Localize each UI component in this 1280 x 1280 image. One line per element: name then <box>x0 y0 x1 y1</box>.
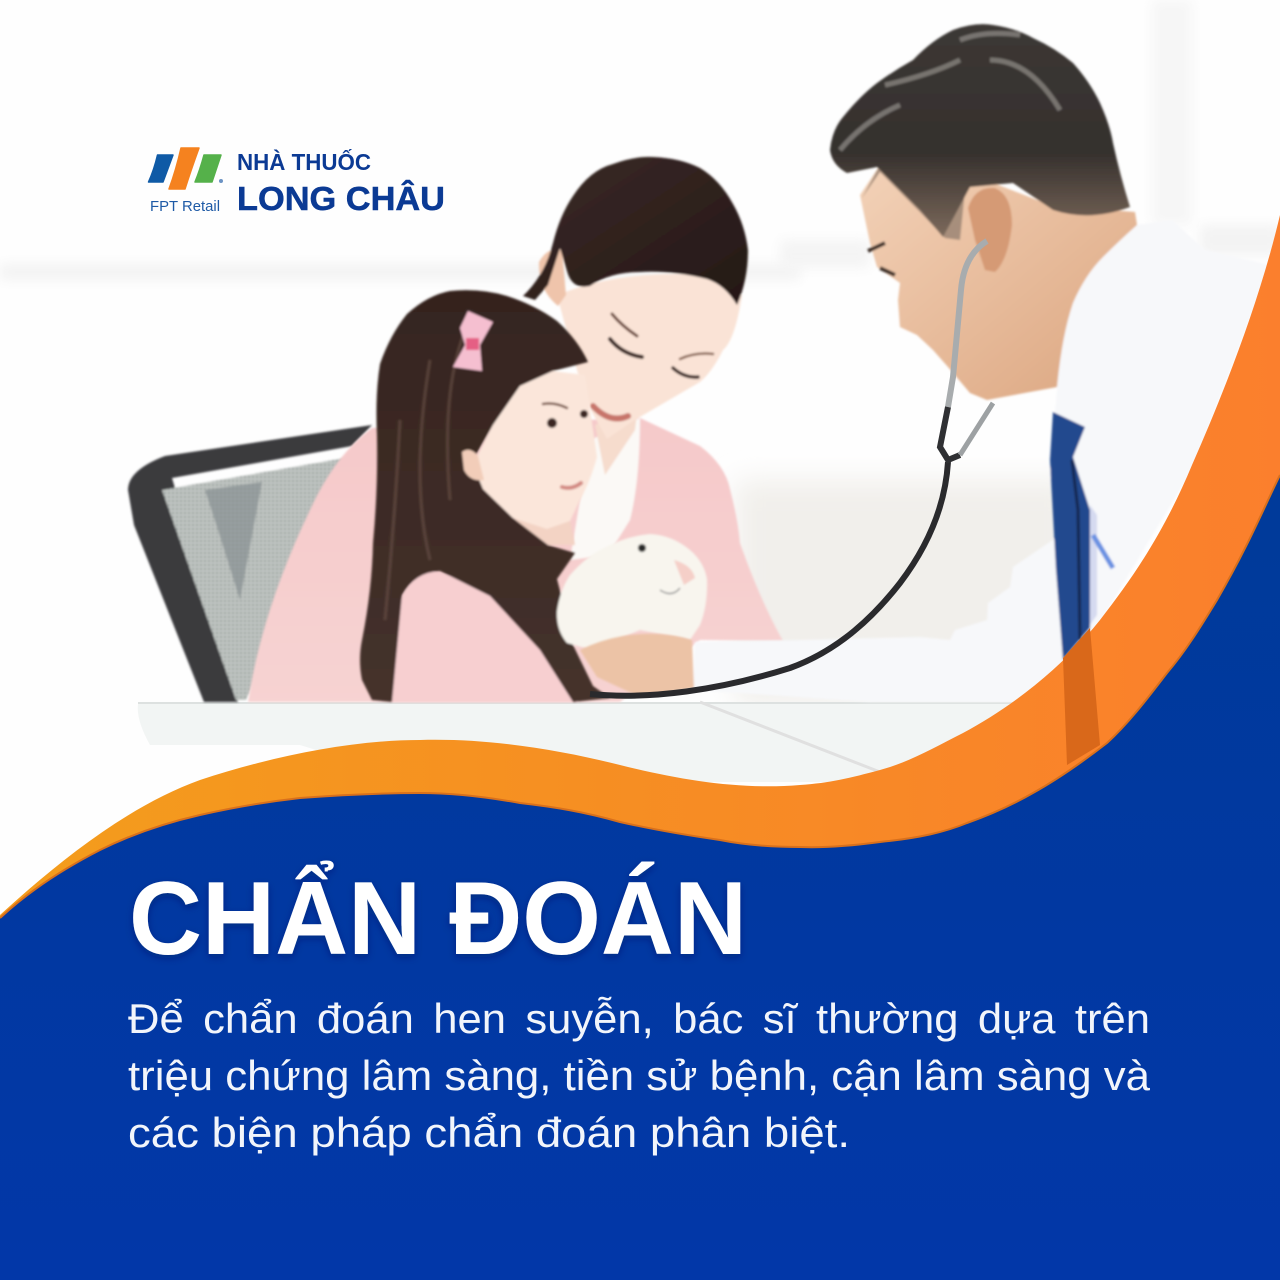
logo: Nhà thuốc: NHÀ THUỐC <box>237 148 371 175</box>
title: CHẨN ĐOÁN <box>129 861 747 977</box>
doctor's shirt shadow <box>1090 505 1097 625</box>
doctor's eyebrow and eye <box>868 243 895 275</box>
girl's hair highlights <box>385 320 470 620</box>
body text <box>128 995 1151 1156</box>
girl's hair <box>360 290 610 702</box>
doctor's hand <box>580 634 694 697</box>
girl's bow <box>453 311 493 371</box>
photo: mother <box>248 157 783 702</box>
mother's eyes and lips <box>593 314 713 418</box>
orange swoosh <box>0 215 1280 1000</box>
girl's face <box>473 371 597 529</box>
mother's neck <box>595 405 638 475</box>
photo background <box>0 0 1280 900</box>
mother's hair <box>523 157 748 305</box>
photo: girl <box>360 290 707 702</box>
mother's face <box>557 274 742 439</box>
mother's ear <box>539 249 566 306</box>
blue wave background <box>0 475 1280 1280</box>
toy rabbit <box>557 534 707 650</box>
mother's cardigan <box>248 418 783 702</box>
photo: doctor <box>580 24 1270 702</box>
mother's shirt <box>570 418 640 560</box>
line 3: các biện pháp chẩn đoán phân biệt. <box>128 1109 850 1156</box>
photo: desk <box>138 702 1020 782</box>
girl's ear <box>462 450 484 480</box>
logo: Long Châu: LONG CHÂU <box>237 180 445 217</box>
swoosh lower edge <box>0 475 1280 918</box>
line 2: triệu chứng lâm sàng, tiền sử bệnh, cận lâm sàng và <box>128 1052 1151 1099</box>
doctor's face and neck <box>860 165 1137 400</box>
line 1: Để chẩn đoán hen suyễn, bác sĩ thường dựa trên <box>128 995 1150 1042</box>
logo mark <box>148 148 223 189</box>
tie showing through orange swoosh <box>1063 628 1100 765</box>
doctor's ear <box>968 188 1012 272</box>
doctor's pen <box>1093 535 1113 568</box>
girl's eyes and mouth <box>543 404 588 488</box>
doctor's tie <box>1050 412 1090 660</box>
photo: chair <box>128 425 372 702</box>
logo <box>148 148 445 217</box>
doctor's grey hair highlights <box>840 33 1060 150</box>
doctor's coat <box>693 220 1270 702</box>
girl's dress <box>390 571 578 702</box>
photo: stethoscope <box>590 241 993 696</box>
logo: FPT Retail: FPT Retail <box>150 198 220 215</box>
girl's neck <box>510 515 575 545</box>
doctor's sideburn <box>862 165 965 240</box>
doctor's hair <box>830 24 1130 237</box>
